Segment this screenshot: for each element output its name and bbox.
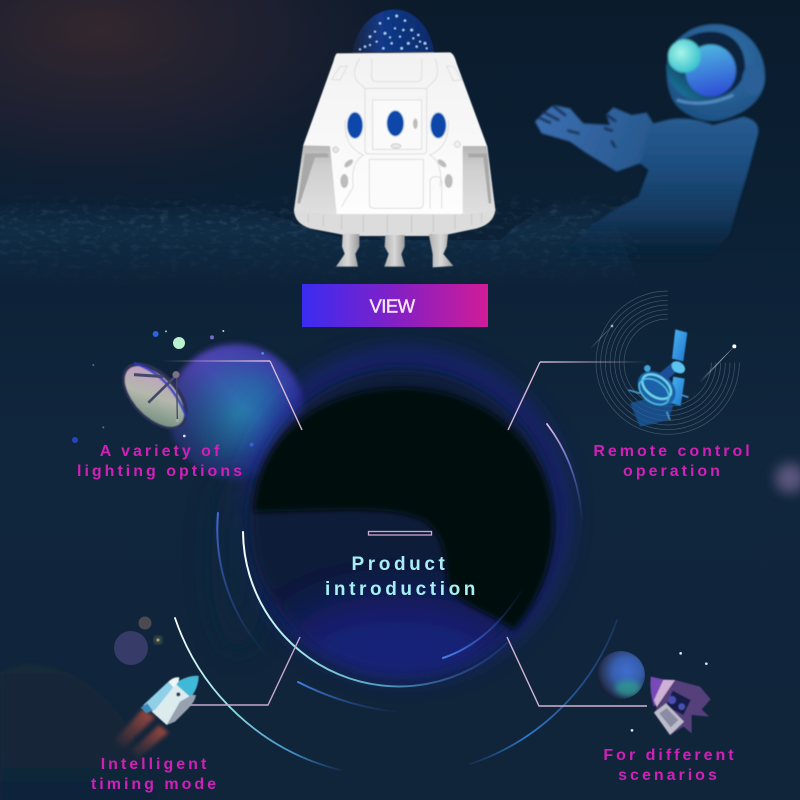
label: lighting bbox=[77, 443, 245, 480]
lower-left hill bbox=[0, 664, 155, 800]
astronaut helmet bbox=[666, 24, 765, 121]
astronaut glove shadows bbox=[538, 106, 615, 147]
astronaut body bbox=[535, 105, 758, 260]
view button: VIEW bbox=[370, 296, 416, 316]
connector line: lighting bbox=[162, 361, 302, 430]
dish bowl bbox=[110, 351, 200, 441]
connector line: scenarios bbox=[507, 637, 647, 706]
capsule hull bbox=[294, 52, 495, 236]
label: remote bbox=[593, 443, 753, 480]
capsule vents bbox=[333, 118, 460, 188]
label: scenarios bbox=[603, 747, 737, 784]
hole black region bbox=[254, 388, 553, 630]
dish stars bbox=[72, 330, 264, 447]
capsule windows bbox=[347, 110, 446, 139]
title bbox=[325, 532, 479, 600]
hole dim left side bbox=[212, 470, 264, 650]
astronaut arm highlight bbox=[535, 105, 653, 172]
signal rings bbox=[596, 291, 739, 434]
label: timing: Intelligent bbox=[101, 756, 209, 773]
capsule product bbox=[294, 9, 495, 267]
planet behind dish bbox=[168, 344, 304, 480]
icon: rocket bbox=[115, 676, 199, 758]
base band bbox=[294, 210, 495, 236]
left side pod bbox=[294, 145, 337, 214]
fuzzy planet right edge bbox=[775, 463, 800, 493]
title text: introduction bbox=[325, 579, 479, 600]
label: scenarios: scenarios bbox=[618, 767, 720, 784]
title text: Product bbox=[352, 554, 448, 575]
title bar bbox=[368, 532, 432, 535]
rocket body bbox=[141, 676, 199, 725]
icon: satellite bbox=[589, 291, 739, 434]
planet near scenarios bbox=[597, 651, 645, 699]
rocket flames bbox=[115, 708, 168, 758]
label: timing: timing mode bbox=[91, 776, 219, 793]
satellite body bbox=[628, 329, 688, 427]
hole lower disc bbox=[248, 366, 559, 676]
small planets lower left bbox=[114, 616, 161, 665]
label: remote: operation bbox=[623, 463, 723, 480]
label: lighting: A variety of bbox=[100, 443, 222, 460]
label: timing bbox=[91, 756, 219, 793]
astronaut bbox=[535, 24, 765, 260]
view button bbox=[302, 284, 488, 327]
label: scenarios: For different bbox=[603, 747, 737, 764]
capsule thrusters bbox=[336, 234, 453, 267]
hull panel lines bbox=[332, 58, 462, 208]
shooting stars bbox=[589, 325, 736, 382]
rocket shell bbox=[650, 677, 711, 735]
label: lighting: lighting options bbox=[77, 463, 245, 480]
hole glow bbox=[250, 360, 558, 668]
capsule pod intakes bbox=[297, 153, 491, 203]
connector line: timing bbox=[180, 637, 300, 705]
right side pod bbox=[463, 146, 495, 214]
moon surface bbox=[0, 201, 630, 274]
visor reflections bbox=[668, 39, 736, 97]
rocket stars bbox=[631, 652, 708, 732]
title text bbox=[325, 554, 479, 600]
capsule dome with stars bbox=[353, 9, 434, 52]
icon: satellite dish bbox=[72, 330, 264, 447]
label: remote: Remote control bbox=[593, 443, 753, 460]
orbit arcs bbox=[175, 424, 617, 770]
black hole bbox=[212, 360, 560, 705]
dish struts bbox=[134, 371, 179, 422]
icon: purple rocket bbox=[631, 652, 711, 735]
connector line: remote bbox=[508, 362, 647, 430]
